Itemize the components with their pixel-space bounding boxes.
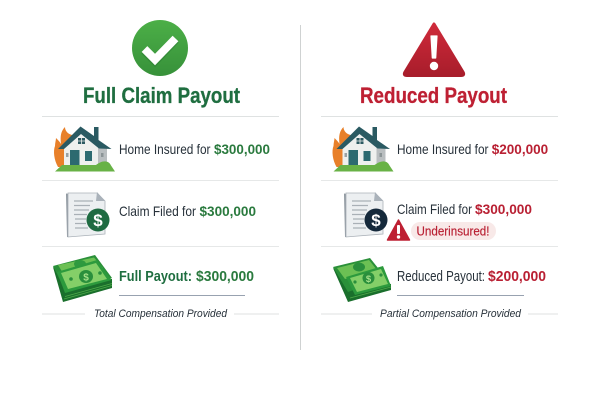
text: full payout xyxy=(119,269,254,285)
center divider xyxy=(300,25,301,350)
icon: smaller stack of green money xyxy=(333,258,391,302)
icon: stack of green money xyxy=(53,255,112,302)
caption: total compensation provided: Total Compensation Provided xyxy=(94,308,228,320)
text: home insured: Home Insured for xyxy=(119,141,211,157)
icon: green check mark xyxy=(132,20,188,76)
text: claim filed xyxy=(397,201,532,217)
text: home insured: $300,000 xyxy=(214,141,270,157)
panel: full claim payout xyxy=(42,20,279,320)
heading: reduced payout: Reduced Payout xyxy=(360,83,507,108)
text: full payout: $300,000 xyxy=(196,269,254,285)
text: claim filed xyxy=(119,203,256,219)
caption: partial compensation provided: Partial Compensation Provided xyxy=(380,308,522,320)
panel: reduced payout xyxy=(321,24,558,320)
badge: underinsured: Underinsured! xyxy=(416,224,490,238)
text: claim filed: $300,000 xyxy=(475,201,532,217)
icon: red warning triangle xyxy=(404,24,464,76)
heading: full claim payout: Full Claim Payout xyxy=(83,83,240,108)
text: home insured: Home Insured for xyxy=(397,141,489,157)
text: claim filed: $300,000 xyxy=(200,203,256,219)
icon: house with flames xyxy=(332,126,394,172)
icon: small warning triangle xyxy=(388,220,410,240)
icon: smaller stack of green money: $ xyxy=(366,274,372,285)
text: home insured: $200,000 xyxy=(492,141,548,157)
text: claim filed: Claim Filed for xyxy=(119,203,196,219)
icon: claim document with green dollar xyxy=(66,192,110,237)
icon: house with flames xyxy=(54,126,115,172)
text: full payout: Full Payout: xyxy=(119,269,192,285)
text: claim filed: Claim Filed for xyxy=(397,201,472,217)
text: reduced payout: $200,000 xyxy=(488,269,546,285)
icon: claim document with green dollar: $ xyxy=(93,211,103,230)
text: reduced payout: Reduced Payout: xyxy=(397,269,485,285)
icon: stack of green money: $ xyxy=(83,272,89,284)
icon: claim document with navy dollar xyxy=(344,192,388,237)
icon: claim document with navy dollar: $ xyxy=(371,211,381,230)
